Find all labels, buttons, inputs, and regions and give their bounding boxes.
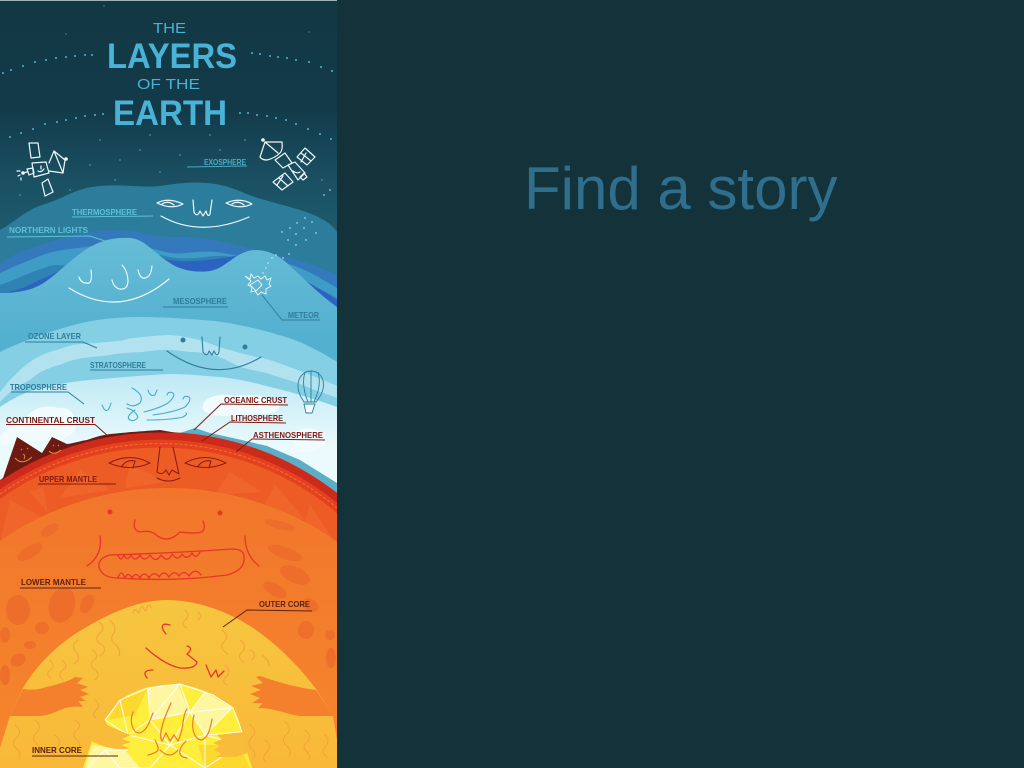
label: ozone layer: OZONE LAYER [28,331,81,341]
earth crust face [109,447,226,481]
troposphere wind swirls [102,388,190,421]
outer core squiggles [14,605,328,762]
label: outer core [223,599,312,627]
outer core face [145,624,224,678]
label: inner core [32,745,118,756]
label: meteor: METEOR [288,310,319,320]
heading: find a story: Find a story [524,155,837,222]
title: THE [153,20,186,37]
label: stratosphere: STRATOSPHERE [90,360,146,370]
title [107,20,237,133]
label: outer core: OUTER CORE [259,599,310,609]
layer: northern lights bands [0,230,337,330]
space background [0,0,337,300]
oceanic crust hill [177,428,337,520]
inner arms: left hand [85,720,131,749]
label: lithosphere: LITHOSPHERE [231,413,283,423]
label: continental crust: CONTINENTAL CRUST [6,415,96,425]
lower mantle spots [0,517,336,685]
clouds [0,395,325,452]
layer: asthenosphere [0,440,337,768]
icon: right satellite [260,139,315,190]
label: asthenosphere: ASTHENOSPHERE [253,430,323,440]
label: meteor [262,295,320,320]
arms: left [10,677,89,716]
inner core face [131,703,212,758]
label: exosphere [187,157,247,167]
layer: lower mantle [0,488,337,768]
layer: outer core [0,600,337,768]
meteor trail [262,189,331,274]
label: asthenosphere [236,430,325,452]
arms: right [250,676,333,716]
label: continental crust [6,415,108,436]
label: northern lights [7,225,105,241]
inner arms: right hand [213,732,248,757]
title: OF THE [137,76,200,93]
label: mesosphere: MESOSPHERE [173,296,227,306]
icon: left satellite [17,143,67,196]
stratosphere face [167,337,261,370]
title: LAYERS [107,37,237,76]
label: ozone layer [25,331,97,348]
layer: continental crust [0,430,177,481]
layer: lithosphere [0,432,337,768]
label: exosphere: EXOSPHERE [204,157,246,167]
label: upper mantle: UPPER MANTLE [39,474,97,484]
layer: thermosphere [0,183,337,330]
label: lower mantle: LOWER MANTLE [21,577,86,587]
icon: hot air balloon [298,371,323,413]
label: oceanic crust: OCEANIC CRUST [224,395,288,405]
layer: ozone [0,335,337,402]
layer: stratosphere [0,317,337,420]
title: EARTH [113,94,227,133]
stars [2,5,333,196]
label: troposphere [10,382,84,404]
layer: upper mantle [0,448,337,768]
icon: meteor [245,274,271,295]
layer: inner core [83,684,252,768]
label: oceanic crust [194,395,288,430]
label: northern lights: NORTHERN LIGHTS [9,225,88,235]
mesosphere face [69,265,169,302]
layer: troposphere [0,374,337,500]
infographic: layers of the earth [0,0,337,768]
layer: mesosphere [0,238,337,400]
thermosphere face [157,200,252,227]
lower mantle face [87,510,259,579]
mantle facets [0,464,337,545]
label: thermosphere: THERMOSPHERE [72,207,137,217]
label: troposphere: TROPOSPHERE [10,382,67,392]
label: lithosphere [202,413,286,441]
label: inner core: INNER CORE [32,745,82,755]
